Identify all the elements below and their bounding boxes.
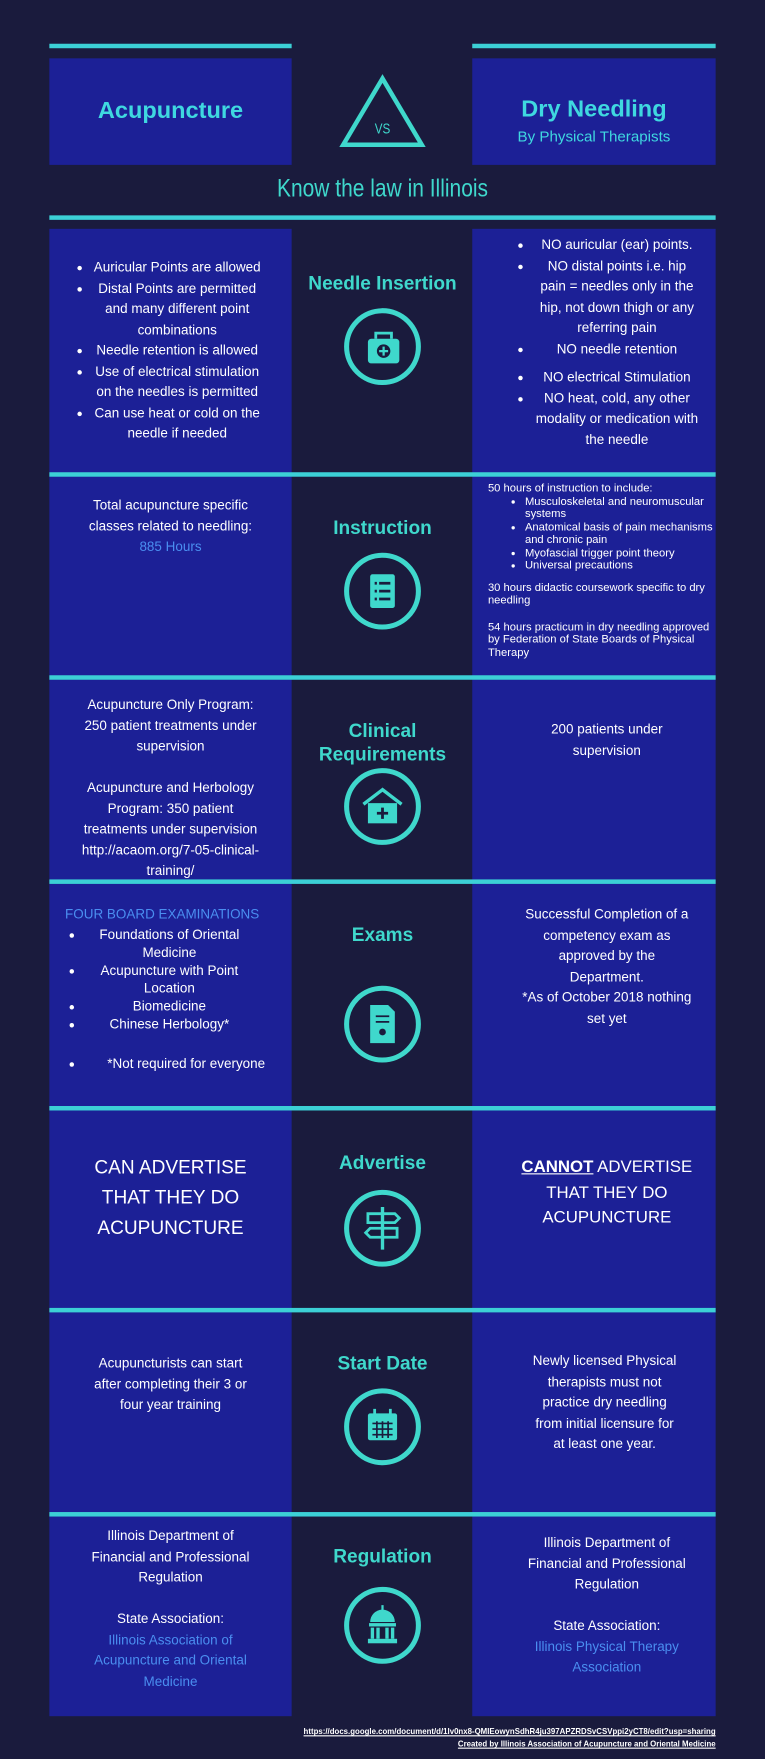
right column background [472,229,716,1716]
top line right [472,44,716,48]
right text: CANNOT ADVERTISE THAT THEY DO ACUPUNCTURE [521,1158,692,1227]
section: regulation [92,1528,686,1689]
left text [94,1355,247,1412]
icon: medical kit [344,308,421,385]
icon: certificate [344,986,421,1062]
left text: Illinois Department of Financial and Professional Regulation [92,1528,249,1585]
header box: acupuncture [49,58,292,165]
left text [82,697,259,878]
right text: approved by the [559,948,655,964]
header box: dry needling [472,58,716,165]
right text: competency exam as [543,927,670,943]
heading: Clinical [349,720,416,741]
heading: Exams [352,924,413,946]
left text: Acupuncture Only Program: 250 patient treatments under supervision [84,697,257,754]
section: instruction [89,482,713,659]
right text [528,1534,686,1675]
right text: NO distal points i.e. hip pain = needles only in the hip, not down thigh or any referring pain [540,257,694,335]
heading: Instruction [333,517,432,538]
left text: Chinese Herbology* [110,1016,229,1031]
right text: Successful Completion of a [525,906,688,922]
section: start date [94,1353,676,1466]
right text [518,237,698,447]
left text: Acupuncturists can start [99,1355,242,1371]
left text: Illinois Association of Acupuncture and Oriental Medicine [94,1632,247,1689]
right text: 54 hours practicum in dry needling approved by Federation of State Boards of Physical Therapy [488,621,709,659]
left text: four year training [120,1397,221,1412]
right text: therapists must not [548,1374,661,1389]
heading: Regulation [333,1546,432,1567]
heading: Advertise [339,1152,426,1173]
icon: calendar [344,1388,421,1466]
left text: Total acupuncture specific classes related to needling: [89,497,252,533]
right text: practice dry needling [542,1394,667,1410]
right text: Illinois Department of Financial and Professional Regulation [528,1534,686,1592]
heading: Start Date [337,1353,428,1374]
left text: Can use heat or cold on the needle if needed [95,404,260,441]
left text: Use of electrical stimulation on the needles is permitted [95,363,259,399]
left text: Foundations of Oriental Medicine [99,926,239,960]
right text: 200 patients under supervision [551,721,663,758]
section: clinical requirements [82,697,663,878]
heading: Requirements [319,744,446,765]
subtitle: Know the law in Illinois [277,174,488,202]
left text: CAN ADVERTISE THAT THEY DO ACUPUNCTURE [94,1156,247,1238]
heading: Needle Insertion [308,273,457,294]
left text: *Not required for everyone [107,1055,265,1071]
left column background [49,229,292,1716]
right text: Newly licensed Physical [533,1353,676,1368]
section: needle insertion [77,237,698,447]
right text: Anatomical basis of pain mechanisms and chronic pain [525,521,713,546]
left text: 885 Hours [139,538,202,554]
header box: acupuncture: Acupuncture [98,98,243,123]
right text [488,482,713,659]
left text: Acupuncture with Point Location [101,962,238,996]
footer credits [304,1728,716,1749]
left text: Acupuncture and Herbology Program: 350 patient treatments under supervision http://acaom.org/7-05-clinical-training/ [82,780,259,878]
footer credits: https://docs.google.com/document/d/1lv0nx8-QMIEowynSdhR4ju397APZRDSvCSVppi2yCT8/edit?usp=sharing [304,1729,716,1736]
header box: dry needling: By Physical Therapists [517,128,670,145]
icon: vs triangle [339,74,426,147]
right text: Department. [570,969,644,984]
right text: NO needle retention [557,340,677,356]
left text: FOUR BOARD EXAMINATIONS [65,906,259,922]
heading [319,720,446,765]
icon: signpost [344,1190,421,1267]
right text: NO auricular (ear) points. [541,237,692,252]
left text [92,1528,249,1689]
right text: Musculoskeletal and neuromuscular systems [525,495,704,520]
right text [522,906,691,1026]
right text: Myofascial trigger point theory [525,547,675,559]
right text: 50 hours of instruction to include: [488,482,653,495]
top line left [49,44,292,48]
right text: *As of October 2018 nothing [522,989,691,1005]
left text: State Association: [117,1611,224,1626]
section: exams [65,906,691,1071]
right text: set yet [587,1010,627,1026]
right text: Universal precautions [525,560,633,572]
right text [533,1353,676,1451]
right text: 30 hours didactic coursework specific to dry needling [488,582,705,607]
header box: dry needling: Dry Needling [521,96,667,122]
right text: Illinois Physical Therapy Association [535,1638,679,1675]
left text [77,259,261,441]
left text: Needle retention is allowed [96,342,258,358]
left text: Biomedicine [133,998,206,1013]
section: advertise [94,1152,692,1267]
footer credits: Created by Illinois Association of Acupuncture and Oriental Medicine [458,1741,716,1749]
right text: at least one year. [553,1436,656,1451]
left text: after completing their 3 or [94,1376,247,1391]
icon: clinic [344,768,421,845]
left text: Auricular Points are allowed [94,259,261,275]
right text: State Association: [553,1617,660,1633]
left text [89,497,252,554]
right text: from initial licensure for [535,1415,674,1431]
icon: list [344,552,421,630]
right text: NO heat, cold, any other modality or medication with the needle [536,390,698,447]
left text: Distal Points are permitted and many different point combinations [98,280,256,337]
icon: vs triangle: VS [375,120,390,137]
icon: capitol [344,1586,421,1664]
left text [65,906,265,1071]
right text: NO electrical Stimulation [543,369,691,385]
